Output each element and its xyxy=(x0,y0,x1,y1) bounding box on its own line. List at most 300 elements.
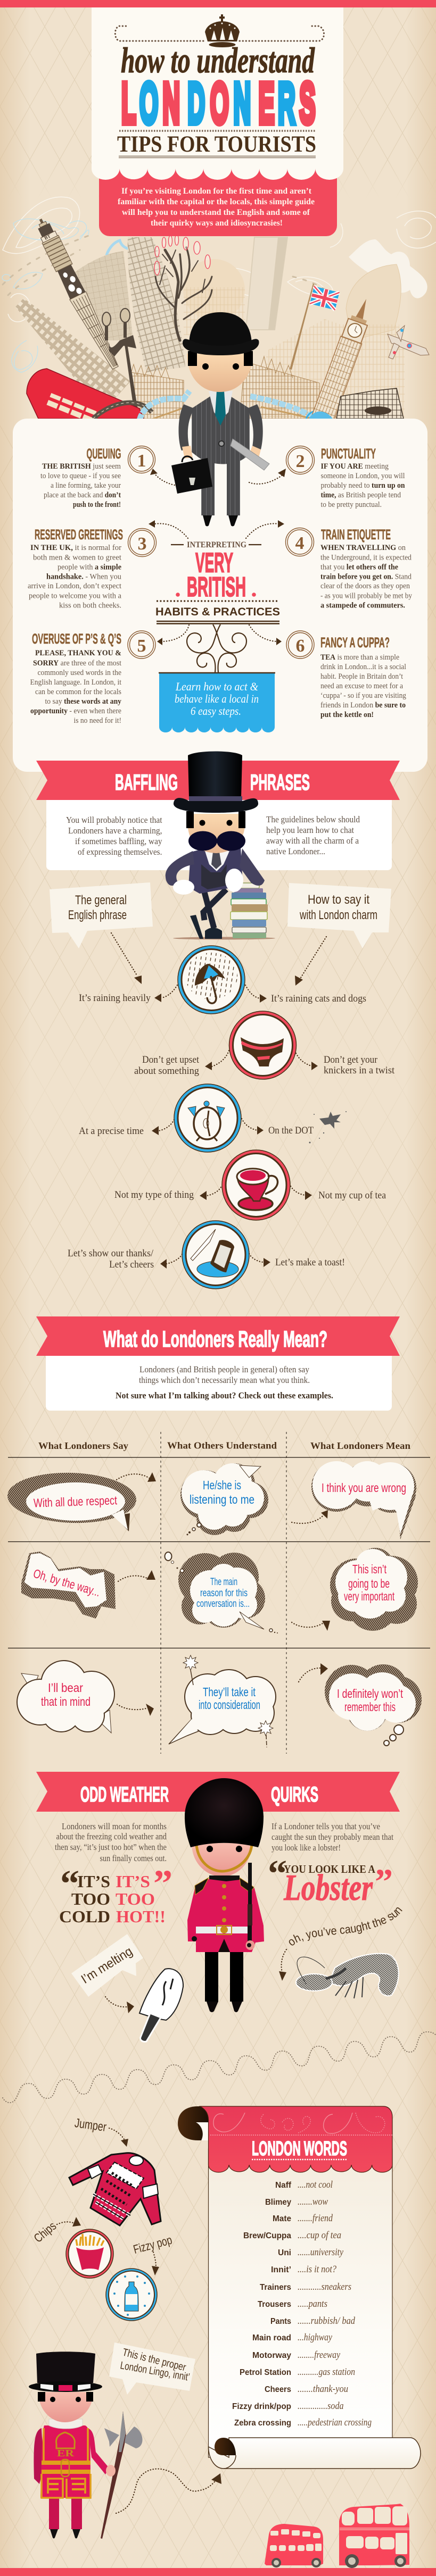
step 2: punctuality xyxy=(286,446,405,509)
arrow to scroll xyxy=(116,2469,221,2513)
icon: toast and knife xyxy=(182,1221,249,1289)
red tunic xyxy=(187,1878,264,1952)
hands xyxy=(182,446,261,462)
note: chips: Chips xyxy=(31,2219,59,2245)
callout: the general English phrase xyxy=(50,882,153,948)
callout: the general English phrase: English phrase xyxy=(68,908,127,922)
quote: you look like a lobster: ” xyxy=(375,1861,393,1902)
word list: Fizzy drink/pop xyxy=(232,2402,291,2411)
column headers: What Londoners Mean xyxy=(310,1440,410,1451)
phrase row: cup of tea xyxy=(114,1150,386,1220)
ribbon: baffling phrases: BAFFLING xyxy=(115,770,178,795)
blue sky scribbles xyxy=(2,219,89,372)
ribbon: baffling phrases: PHRASES xyxy=(250,770,310,795)
step 2: punctuality: IF YOU ARE meeting xyxy=(320,462,389,471)
arrow xyxy=(118,1570,155,1581)
step 4: train etiquette: the Underground, it is expected xyxy=(320,553,412,562)
centre heading: interpreting very British: HABITS & PRACTICES xyxy=(155,606,280,618)
blue callout: learn how to act: behave like a local in xyxy=(175,692,259,705)
step 1: queuing: place at the back and don’t xyxy=(44,491,121,499)
phrase labels: Don’t get upset xyxy=(142,1054,200,1065)
centre heading: interpreting very British: BRITISH xyxy=(187,572,246,603)
column headers: What Londoners Say xyxy=(38,1440,128,1451)
icon: alarm clock xyxy=(174,1084,241,1152)
step 5: overuse of p's and q's: is no need for it! xyxy=(73,716,121,725)
arrows xyxy=(152,1119,264,1135)
phrase labels: On the DOT xyxy=(268,1125,314,1136)
tunic xyxy=(40,2425,91,2498)
callout: how to say it with London charm: How to say it xyxy=(308,893,369,907)
thought cloud: this isn't going to be very important: This isn’t xyxy=(352,1562,386,1576)
panel: very British habits and practices xyxy=(13,419,427,772)
step 1: queuing: to love to queue - if you see xyxy=(40,472,121,480)
phrase labels: It’s raining cats and dogs xyxy=(271,993,366,1004)
speech bubble: they'll take it into consideration: into consideration xyxy=(199,1698,260,1712)
icon: small red bus xyxy=(265,2524,323,2567)
step 3: reserved greetings: both men & women to greet xyxy=(33,553,121,562)
step 4: train etiquette: clear of the doors as they open xyxy=(320,582,410,590)
icon: teacup xyxy=(222,1150,290,1220)
panel: baffling phrases intro: help you learn how to chat xyxy=(266,825,354,835)
column headers: What Others Understand xyxy=(167,1440,277,1451)
phrase labels: Don’t get your xyxy=(324,1054,378,1065)
head and moustache xyxy=(186,811,245,853)
panel: baffling phrases intro: of expressing themselves. xyxy=(78,847,162,857)
step 6: fancy a cuppa: ‘cuppa’ - so if you are visiting xyxy=(320,691,406,700)
speech bubble: with all due respect xyxy=(6,1471,137,1531)
scroll: London words xyxy=(178,2106,421,2469)
top band xyxy=(0,0,436,7)
dotted rule xyxy=(119,130,316,132)
panel: baffling phrases intro: away with all the charm of a xyxy=(266,836,359,846)
BT Tower xyxy=(32,215,121,373)
London skyline illustration xyxy=(2,197,436,429)
quote: it's too cold, it's too hot: “ xyxy=(60,1862,79,1905)
top hat xyxy=(174,751,258,813)
arrows xyxy=(205,1051,318,1070)
step 4: train etiquette xyxy=(285,527,413,610)
quote: it's too cold, it's too hot: COLD xyxy=(59,1907,110,1926)
quote: you look like a lobster: “ xyxy=(268,1852,287,1895)
hat xyxy=(29,2352,102,2392)
phrase labels: Let’s make a toast! xyxy=(275,1257,345,1268)
heading: LONDON WORDS xyxy=(252,2138,347,2160)
bare tree and red leaves xyxy=(155,247,212,340)
step 5: overuse of p's and q's: can be common for the locals xyxy=(35,688,121,696)
callout: how to say it with London charm: with London charm xyxy=(299,908,377,922)
word list: ....is it not? xyxy=(298,2264,336,2275)
step 5: overuse of p's and q's: 5 xyxy=(137,636,146,656)
blue callout: learn how to act xyxy=(159,673,275,732)
panel: baffling phrases intro: You will probably notice that xyxy=(66,815,162,825)
phrase labels xyxy=(79,1125,314,1137)
tunic: ER xyxy=(57,2448,75,2458)
step 1: queuing: 1 xyxy=(137,451,146,471)
panel: what do Londoners really mean intro: Not sure what I’m talking about? Check out these examples. xyxy=(116,1390,333,1400)
callout: this is the proper London lingo xyxy=(109,2342,195,2395)
tilted skyscraper xyxy=(15,298,130,412)
speech bubble: they'll take it into consideration xyxy=(169,1655,276,1747)
ornate blue and gold frame xyxy=(139,391,331,420)
panel: what do Londoners really mean intro xyxy=(46,1356,392,1411)
word list: Pants xyxy=(270,2317,291,2326)
bottom band xyxy=(0,2568,436,2576)
word list: .....pedestrian crossing xyxy=(298,2417,372,2428)
ribbon: what do Londoners really mean xyxy=(36,1316,400,1356)
ribbon: odd weather quirks xyxy=(36,1772,400,1812)
step 4: train etiquette: train before you get on. Stand xyxy=(320,572,412,581)
text: freezing weather xyxy=(55,1821,167,1863)
arms and white gloves xyxy=(166,848,265,895)
word list: Main road xyxy=(252,2333,291,2342)
arrows xyxy=(154,985,267,1003)
step 1: queuing: QUEUING xyxy=(86,446,121,462)
briefcase xyxy=(171,456,212,494)
step 6: fancy a cuppa: put the kettle on! xyxy=(320,711,374,719)
step 4: train etiquette: 4 xyxy=(295,533,305,553)
header swirls xyxy=(210,2113,392,2135)
icon: crown with dotted flourish xyxy=(115,14,324,47)
winding road xyxy=(93,403,152,419)
word list: Cheers xyxy=(265,2385,291,2394)
word list: .....pants xyxy=(298,2298,327,2310)
white clouds on the right xyxy=(349,239,427,298)
peach centre dome xyxy=(183,259,245,321)
text: freezing weather: about the freezing cold weather and xyxy=(56,1831,167,1841)
word list: Trainers xyxy=(260,2283,291,2292)
jacket and waistcoat xyxy=(188,847,243,894)
red intro panel: If you’re visiting London for the first time and aren’t xyxy=(121,187,312,196)
speech bubble: I think you are wrong: I think you are wrong xyxy=(322,1481,406,1495)
phrase labels xyxy=(79,993,366,1004)
panel: what do Londoners really mean intro: things which don’t necessarily mean what you think. xyxy=(139,1375,310,1385)
double rule xyxy=(119,156,316,157)
head and bowler hat xyxy=(183,312,259,392)
phrase row: knickers xyxy=(134,1011,395,1079)
red intro panel xyxy=(99,160,337,236)
curved handwritten note: oh, you've caught the sun: oh, you’ve caught the sun xyxy=(289,1907,402,1946)
thought cloud: he or she is listening to me: He/she is xyxy=(203,1478,241,1492)
thought cloud: the main reason xyxy=(165,1552,278,1633)
phrase labels: Let’s show our thanks/ xyxy=(68,1248,154,1259)
legs and shoes xyxy=(49,2498,82,2538)
column headers xyxy=(38,1440,410,1451)
step 1: queuing: push to the front! xyxy=(73,501,121,509)
word list: Innit’ xyxy=(271,2265,291,2274)
icon: chips xyxy=(66,2229,113,2278)
red intro panel: their quirky ways and idiosyncrasies! xyxy=(151,219,283,228)
text: freezing weather: Londoners will moan for months xyxy=(62,1821,167,1831)
Gherkin tower xyxy=(128,237,185,372)
word list: Motorway xyxy=(252,2351,291,2360)
thought cloud: the main reason: The main xyxy=(210,1577,237,1588)
title: how to understand: how to understand xyxy=(121,40,315,80)
step 5: overuse of p's and q's: commonly used words in the xyxy=(37,669,121,677)
word list: Petrol Station xyxy=(240,2368,291,2377)
step 1: queuing xyxy=(40,446,155,509)
text: caught the sun: you look like a lobster! xyxy=(272,1843,341,1853)
word list: Mate xyxy=(273,2214,291,2223)
arrow xyxy=(299,1663,328,1682)
step 2: punctuality: probably need to turn up on xyxy=(320,481,405,490)
callout: this is the proper London lingo: London Lingo, innit’ xyxy=(119,2360,191,2383)
title card xyxy=(92,7,343,236)
panel: food and clothing words illustrated xyxy=(31,2116,174,2321)
word list: Blimey xyxy=(265,2198,291,2207)
word list: Uni xyxy=(278,2248,291,2257)
ribbon: baffling phrases xyxy=(36,761,400,800)
phrase labels: Let’s cheers xyxy=(109,1259,154,1270)
step 2: punctuality: someone in London, you will xyxy=(320,472,405,480)
thought cloud: the main reason: reason for this xyxy=(200,1588,248,1599)
icon: fizzy pop bottle xyxy=(106,2269,157,2321)
phrase labels: Not my cup of tea xyxy=(318,1190,386,1201)
icon: lobster xyxy=(297,1954,398,1998)
arrow xyxy=(292,1510,328,1523)
right light tower xyxy=(246,237,287,330)
centre heading: interpreting very British: VERY xyxy=(195,548,233,579)
step 4: train etiquette: that you let others off the xyxy=(320,563,399,571)
step 5: overuse of p's and q's: OVERUSE OF P’S & Q’S xyxy=(32,631,121,647)
speech bubble: I'll bear that in mind xyxy=(17,1660,115,1733)
step 6: fancy a cuppa: need an excuse to meet for a xyxy=(320,682,404,690)
red intro panel: familiar with the capital or the locals, this simple guide xyxy=(118,197,315,206)
quote: it's too cold, it's too hot: TOO xyxy=(116,1889,155,1908)
panel: baffling phrases intro xyxy=(46,800,392,870)
thought cloud: this isn't going to be very important: very important xyxy=(344,1589,394,1603)
step 5: overuse of p's and q's: opportunity - even when there xyxy=(30,707,121,715)
step 5: overuse of p's and q's: SORRY are three of the most xyxy=(33,659,121,668)
word list: Brew/Cuppa xyxy=(243,2231,291,2240)
red telephone box xyxy=(27,369,144,423)
bearskin hat xyxy=(185,1778,264,1847)
step 5: overuse of p's and q's: English language. In London, it xyxy=(30,678,121,687)
step 3: reserved greetings: arrive in London, don’t expect xyxy=(28,582,121,590)
text: freezing weather: sun finally comes out. xyxy=(100,1853,167,1863)
paper sheet xyxy=(209,2149,392,2457)
word list: .......friend xyxy=(298,2213,333,2224)
rifle and hand xyxy=(246,1863,254,1950)
BT Tower: BT xyxy=(44,234,52,241)
word list: .......wow xyxy=(298,2196,328,2207)
text: caught the sun: If a Londoner tells you that you’ve xyxy=(272,1821,380,1831)
speech bubble: with all due respect: With all due respect xyxy=(34,1493,118,1510)
word list: ....not cool xyxy=(298,2179,333,2190)
St Paul's dome xyxy=(266,264,405,419)
text: freezing weather: then say, “it’s just too hot” when the xyxy=(55,1842,167,1852)
thought cloud: he or she is listening to me: listening to me xyxy=(190,1493,254,1506)
arrows xyxy=(200,1186,312,1200)
note: jumper: Jumper xyxy=(73,2116,108,2135)
legs xyxy=(201,457,215,515)
red scalloped header xyxy=(200,2106,392,2172)
arrow xyxy=(109,2128,125,2140)
crossed legs and shoes xyxy=(190,888,226,939)
bottom roll xyxy=(209,2438,421,2469)
step 4: train etiquette: - as you will probably be met by xyxy=(320,591,413,600)
step 6: fancy a cuppa: habit. People in Britain don’t xyxy=(320,672,403,681)
phrase labels: At a precise time xyxy=(79,1126,144,1137)
step 3: reserved greetings: handshake. - When you xyxy=(46,572,121,581)
head and chin strap xyxy=(192,1843,252,1881)
quote: you look like a lobster xyxy=(268,1852,393,1908)
newspaper xyxy=(231,439,269,470)
halberd xyxy=(101,2411,142,2539)
word list: ........freeway xyxy=(298,2349,340,2361)
shoes xyxy=(203,515,238,527)
step 3: reserved greetings: RESERVED GREETINGS xyxy=(35,527,123,543)
panel: baffling phrases intro: The guidelines below should xyxy=(266,814,360,824)
thought cloud: I definitely won't remember this: remember this xyxy=(344,1700,396,1714)
icon: knickers xyxy=(229,1011,296,1079)
arrow xyxy=(153,2252,156,2269)
step 6: fancy a cuppa: drink in London...it is a social xyxy=(320,663,406,671)
street lamp xyxy=(102,309,139,420)
quote: it's too cold, it's too hot xyxy=(59,1862,172,1926)
thought cloud: he or she is listening to me xyxy=(180,1463,268,1535)
speech bubble: oh by the way: Oh, by the way... xyxy=(32,1566,102,1599)
quote: it's too cold, it's too hot: IT’S xyxy=(77,1872,110,1891)
figure: Queen's Guard xyxy=(185,1778,264,2012)
ribbon: odd weather quirks: ODD WEATHER xyxy=(80,1783,169,1806)
step 1: queuing: a line forming, take your xyxy=(51,481,121,490)
white cloud swirls xyxy=(3,197,436,326)
Union flag xyxy=(290,284,340,370)
word list: ......rubbish/ bad xyxy=(298,2315,355,2327)
phrase labels xyxy=(134,1054,395,1077)
thought cloud: I definitely won't remember this xyxy=(325,1664,422,1746)
figure: gentleman in top hat with books xyxy=(166,751,275,939)
arrowhead xyxy=(72,2217,81,2227)
speech bubble: I think you are wrong xyxy=(311,1461,416,1539)
word list xyxy=(232,2179,372,2428)
title: LONDONERS: LONDONERS xyxy=(121,72,315,135)
speech bubble: oh by the way xyxy=(21,1552,116,1619)
panel: baffling phrases intro: native Londoner... xyxy=(266,846,325,856)
blue callout: learn how to act: 6 easy steps. xyxy=(191,704,241,718)
legs and boots xyxy=(205,1952,243,2012)
arms xyxy=(34,2428,109,2484)
quote: you look like a lobster: YOU LOOK LIKE A xyxy=(284,1863,376,1875)
right leg xyxy=(227,457,240,515)
step 3: reserved greetings: IN THE UK, it is normal for xyxy=(30,544,121,552)
ribbon: odd weather quirks: QUIRKS xyxy=(271,1783,318,1806)
phrase labels: about something xyxy=(134,1065,199,1077)
step 1: queuing: THE BRITISH just seem xyxy=(42,462,121,471)
quote: it's too cold, it's too hot: TOO xyxy=(71,1889,110,1908)
red intro panel: will help you to understand the English and some of xyxy=(122,208,310,217)
step 3: reserved greetings: people with a simple xyxy=(57,563,122,571)
speech bubble: I'll bear that in mind: I’ll bear xyxy=(48,1681,83,1695)
thought cloud: this isn't going to be very important: going to be xyxy=(348,1577,390,1590)
icon: patterned jumper xyxy=(69,2153,161,2225)
note: fizzy pop: Fizzy pop xyxy=(132,2233,174,2256)
comparison table xyxy=(6,1432,430,1754)
figure: Beefeater xyxy=(29,2352,142,2539)
dotted wavy divider xyxy=(3,2032,436,2103)
word list: ...highway xyxy=(298,2332,332,2343)
text: caught the sun xyxy=(272,1821,393,1853)
dark sketched building xyxy=(336,388,404,419)
Houses of Parliament xyxy=(130,372,184,419)
step 5: overuse of p's and q's xyxy=(30,631,155,725)
arrow xyxy=(57,2222,75,2224)
head xyxy=(38,2392,93,2422)
arrowhead xyxy=(121,2139,128,2147)
step 5: overuse of p's and q's: to say these words at any xyxy=(45,697,122,706)
phrase row: on the dot xyxy=(79,1084,347,1152)
step 6: fancy a cuppa xyxy=(286,631,406,719)
icon: large red bus xyxy=(339,2504,409,2568)
callout: how to say it with London charm xyxy=(287,883,391,948)
word list: Naff xyxy=(275,2181,292,2190)
step 3: reserved greetings: kiss on both cheeks. xyxy=(59,601,121,610)
step 2: punctuality: time, as British people tend xyxy=(320,491,401,499)
phrase labels xyxy=(68,1248,345,1270)
wind dashes xyxy=(3,234,335,301)
biplane xyxy=(388,326,429,359)
curved handwritten note: oh, you've caught the sun xyxy=(279,1907,402,1981)
word list: .......thank-you xyxy=(298,2383,348,2395)
word list: ...........sneakers xyxy=(298,2281,351,2292)
quote: you look like a lobster: Lobster xyxy=(283,1868,373,1908)
speech bubble: they'll take it into consideration: They’ll take it xyxy=(203,1685,256,1699)
step 6: fancy a cuppa: 6 xyxy=(296,636,305,656)
step 2: punctuality: to be pretty punctual. xyxy=(320,501,382,509)
phrase row: raining xyxy=(79,946,366,1014)
text: caught the sun: caught the sun they probably mean that xyxy=(272,1832,393,1842)
suit jacket xyxy=(178,396,263,464)
scalloped white card xyxy=(92,7,343,180)
arrow xyxy=(292,1621,330,1631)
panel: what do Londoners really mean intro: Londoners (and British people in general) often say xyxy=(139,1364,309,1374)
phrase labels: knickers in a twist xyxy=(324,1065,395,1076)
quote: it's too cold, it's too hot: HOT!! xyxy=(116,1907,166,1926)
word list: ....cup of tea xyxy=(298,2230,341,2241)
step 3: reserved greetings xyxy=(28,527,157,610)
callout: I'm melting: I’m melting xyxy=(79,1944,135,1987)
step 2: punctuality: 2 xyxy=(296,452,305,471)
subtitle: tips for tourists: TIPS FOR TOURISTS xyxy=(117,132,316,157)
centre heading: interpreting very British xyxy=(155,540,280,623)
hand xyxy=(106,2465,116,2477)
arrows: figure to numbered steps xyxy=(149,469,286,645)
quote: it's too cold, it's too hot: ” xyxy=(153,1862,172,1905)
blue callout: learn how to act: Learn how to act & xyxy=(175,680,259,693)
thought cloud: I definitely won't remember this: I definitely won’t xyxy=(337,1687,403,1700)
step 5: overuse of p's and q's: PLEASE, THANK YOU & xyxy=(35,649,121,657)
ruff collar xyxy=(49,2419,83,2429)
arrow xyxy=(117,1704,154,1716)
icon: melting ice lolly xyxy=(139,1969,183,2041)
word list: Trousers xyxy=(258,2300,291,2309)
callout: I'm melting xyxy=(71,1934,143,2013)
panel: baffling phrases intro: if sometimes baffling, way xyxy=(75,836,162,846)
callout: this is the proper London lingo: This is the proper xyxy=(121,2347,187,2373)
step 4: train etiquette: WHEN TRAVELLING on xyxy=(320,544,406,552)
thought cloud: the main reason: conversation is... xyxy=(196,1598,250,1610)
arrowhead xyxy=(152,2266,159,2275)
step 6: fancy a cuppa: friends in London be sure to xyxy=(320,701,406,710)
arrows xyxy=(160,1254,270,1269)
speech bubble: I'll bear that in mind: that in mind xyxy=(41,1695,91,1708)
word list: ......university xyxy=(298,2247,343,2258)
stack of books xyxy=(231,883,268,938)
word list: ..............soda xyxy=(298,2400,344,2412)
phrase labels: It’s raining heavily xyxy=(79,993,151,1004)
glass office dome xyxy=(69,251,133,340)
shirt and tie xyxy=(209,391,233,446)
